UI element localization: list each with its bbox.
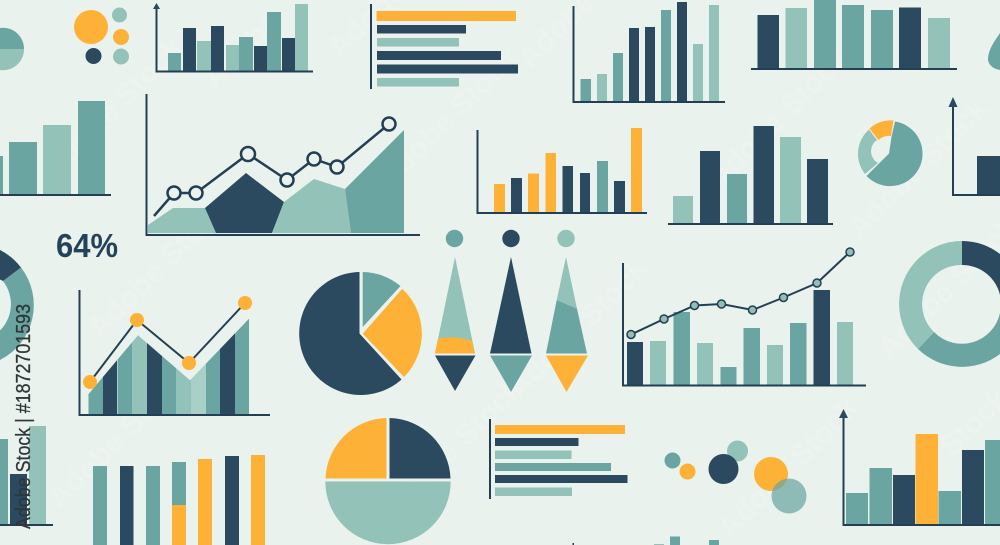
area chart with line — [146, 94, 420, 235]
watermarks: Adobe Stock — [372, 42, 525, 195]
watermarks: Adobe — [327, 286, 416, 375]
bar chart cropped at bottom — [572, 536, 719, 545]
bar chart: centre right — [668, 126, 833, 225]
watermarks: Adobe Stock — [712, 392, 865, 545]
horizontal bar chart top — [370, 4, 518, 89]
bar chart bottom right — [839, 409, 1000, 525]
trend line with markers — [154, 118, 396, 216]
bar chart: top centre — [574, 2, 725, 102]
bar chart bottom left — [0, 426, 53, 526]
cone marker: light teal and orange — [546, 230, 588, 392]
line series with markers — [627, 248, 854, 338]
pie chart: quarters and half — [325, 418, 451, 544]
bubble cluster — [664, 440, 806, 514]
bar and line combo chart — [623, 248, 866, 386]
watermarks: Adobe Stock — [42, 362, 195, 515]
bar chart: left edge — [0, 101, 111, 196]
stock id credit: Adobe Stock | #1872701593 — [13, 304, 35, 529]
percentage label: 64% — [56, 227, 118, 264]
cone marker: navy — [490, 230, 532, 392]
watermarks: Adobe — [197, 6, 286, 95]
shape cropped at right edge — [988, 33, 1000, 70]
small donut pie — [858, 120, 923, 186]
cone marker: teal and orange — [435, 230, 476, 391]
wide bar chart top right — [751, 0, 957, 70]
watermarks: Adobe Stock — [702, 42, 855, 195]
watermarks: Adobe Stock — [377, 372, 530, 525]
watermarks: Adobe Stock — [502, 252, 655, 405]
striped area chart with orange line — [80, 290, 270, 415]
dot cluster top left — [74, 8, 129, 64]
watermarks: Adobe Stock — [37, 32, 190, 185]
pie chart: navy teal orange — [299, 272, 422, 395]
bar chart with orange bars — [478, 128, 647, 213]
bar columns bottom — [93, 455, 265, 545]
large donut right — [899, 241, 1000, 367]
horizontal bar chart bottom — [489, 419, 628, 499]
donut cropped at left edge — [0, 250, 34, 360]
watermarks: Adobe Stock — [842, 92, 995, 245]
orange markers line — [83, 296, 252, 389]
pie chart cropped at left edge — [0, 28, 24, 70]
bar chart: top left with arrow axis — [153, 3, 313, 72]
bar chart cropped at right edge — [948, 97, 1000, 195]
watermarks: Adobe Stock — [82, 192, 235, 345]
